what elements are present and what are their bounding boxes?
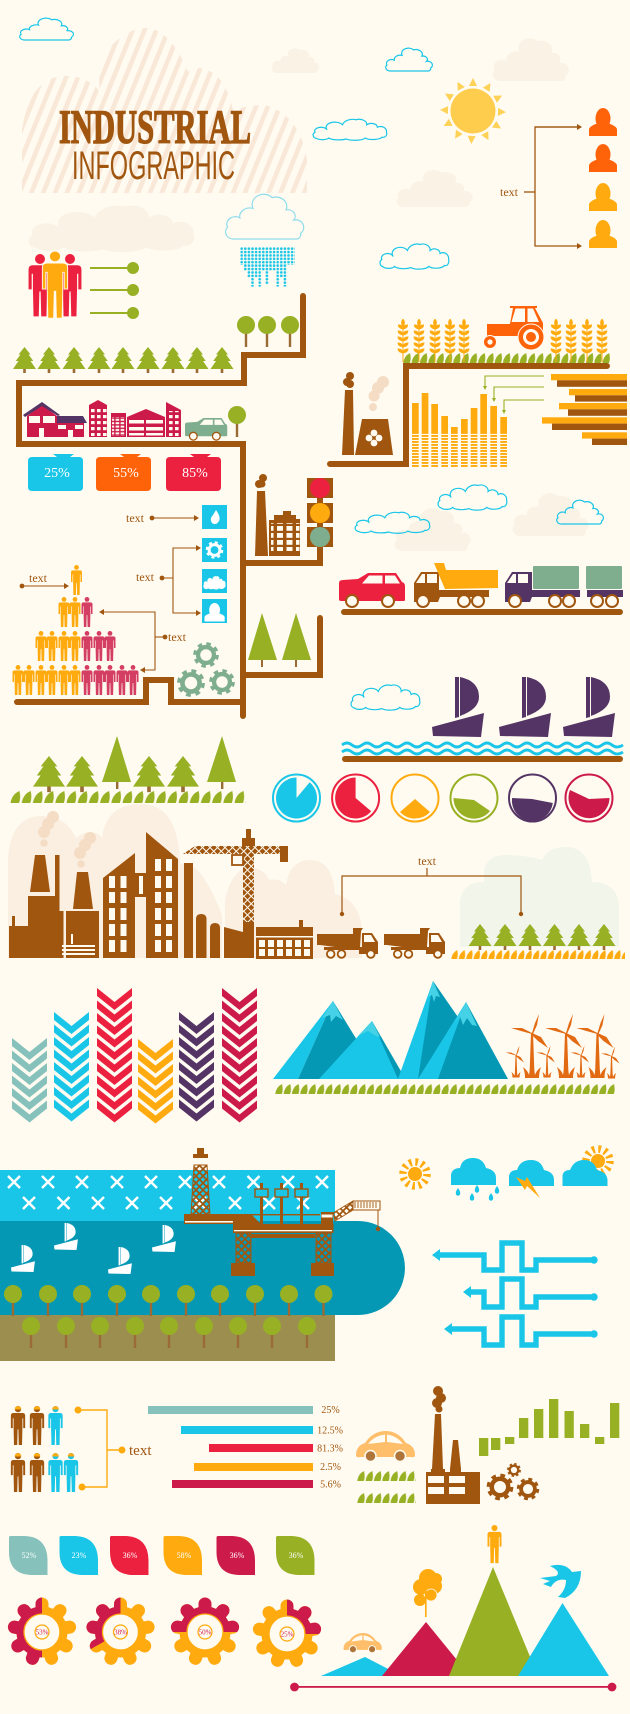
pipe, right: [330, 366, 607, 464]
percent leaves: 58%: [177, 1551, 192, 1560]
round trees: [237, 316, 299, 347]
callout labels: text: [168, 630, 187, 644]
factory, lower: [426, 1386, 480, 1504]
tractor: [484, 306, 544, 350]
shoreline: [345, 756, 620, 762]
percent tags: 25%: [44, 466, 70, 481]
pale background clouds, top: [29, 38, 569, 252]
chevron columns: [12, 988, 257, 1124]
horizontal bar chart: 81.3%: [317, 1444, 343, 1454]
callout labels: text: [136, 570, 155, 584]
swallow: [540, 1565, 581, 1598]
percent leaves: 23%: [72, 1551, 87, 1560]
flower gauge: 38%: 38%: [114, 1628, 127, 1636]
road: [344, 609, 620, 615]
amber tree: [413, 1569, 442, 1617]
percent leaves: [9, 1536, 314, 1575]
main pipe: [19, 296, 303, 716]
flower gauge: 25%: 25%: [281, 1630, 294, 1638]
label: text worker: text: [129, 1443, 152, 1459]
callout labels: text: [29, 571, 48, 585]
city silhouette: [9, 832, 313, 959]
green connector lines: [90, 263, 138, 318]
sky crosses: [8, 1176, 328, 1209]
timeline: [290, 1683, 616, 1691]
striped title cloud: [22, 28, 307, 193]
title: INDUSTRIAL: [59, 101, 251, 154]
avatars: [589, 108, 617, 248]
triangular trees: [248, 613, 311, 667]
rain dots: [240, 247, 295, 287]
red car: [339, 573, 405, 607]
peach car: [356, 1431, 415, 1462]
city backdrop: [8, 804, 362, 958]
traffic light: [307, 478, 333, 555]
forest backdrop: [460, 847, 619, 947]
title: [59, 101, 251, 188]
stacked bars, right: [542, 374, 627, 445]
oil rig: [184, 1148, 380, 1276]
people pyramid: [12, 565, 138, 695]
small car: [344, 1633, 382, 1653]
diverging green bars: [479, 1399, 619, 1456]
small grass strips: [357, 1471, 416, 1503]
clouds, middle right: [351, 485, 603, 710]
brown gears: [489, 1464, 537, 1498]
smoke plumes: [38, 811, 96, 868]
pines and amber field: [451, 924, 625, 959]
callout dots: [20, 516, 167, 639]
weather icons: [403, 1149, 610, 1201]
tree rows: [4, 1285, 332, 1348]
percent tags: 55%: [113, 466, 139, 481]
label: text over trucks: text: [418, 854, 437, 868]
horizontal bar chart: [148, 1405, 343, 1490]
callout labels: [29, 511, 187, 644]
factory with cooling tower: [342, 372, 393, 455]
blue outline clouds, top: [20, 18, 449, 269]
workers: [11, 1406, 78, 1492]
town: [23, 400, 246, 440]
tower crane: [183, 829, 288, 922]
pine row: [13, 347, 234, 373]
callout labels: text: [126, 511, 145, 525]
oil scene backdrop: [0, 1170, 405, 1361]
colored mountains: [321, 1567, 609, 1676]
percent tags: 85%: [182, 466, 208, 481]
green gears: [179, 644, 233, 695]
sailboats: [432, 677, 615, 737]
white sailboats: [11, 1223, 176, 1274]
percent leaves: 36%: [123, 1551, 138, 1560]
wind turbines: [506, 1014, 620, 1078]
summit person: [488, 1525, 501, 1563]
horizontal bar chart: 2.5%: [320, 1462, 341, 1473]
flower gauge: 53%: 53%: [36, 1628, 49, 1636]
bar chart, amber: [412, 393, 507, 467]
people group: [29, 251, 81, 318]
flower gauge: 50%: [177, 1604, 233, 1658]
pipe branches: [17, 550, 320, 702]
factory, left: [255, 474, 300, 556]
title: INFOGRAPHIC: [72, 144, 235, 188]
percent leaves: 36%: [230, 1551, 245, 1560]
grass strip: [275, 1084, 615, 1094]
percent leaves: 52%: [22, 1551, 37, 1560]
pipe arrows: [432, 1243, 598, 1345]
purple truck: [505, 566, 623, 607]
trucks, bottom city: [317, 928, 445, 958]
wheat field: [398, 319, 610, 363]
icon tiles: [202, 505, 227, 623]
green arrows: [485, 376, 544, 413]
percent tags: [28, 454, 221, 491]
horizontal bar chart: 5.6%: [320, 1480, 341, 1490]
worker bracket: [75, 1407, 125, 1490]
flower gauge: 25%: [259, 1606, 315, 1660]
dump truck: [414, 563, 498, 607]
horizontal bar chart: 12.5%: [317, 1426, 343, 1436]
bracket over trucks: [340, 868, 523, 916]
forest strip: [10, 736, 246, 803]
bracket to four avatars: [524, 127, 581, 246]
label: text: text: [500, 185, 519, 199]
waves: [342, 743, 623, 754]
callouts with arrows: [22, 518, 200, 670]
flower gauge: 38%: [93, 1604, 148, 1658]
flower gauge: 50%: 50%: [199, 1628, 212, 1636]
icon: sun: [440, 78, 506, 144]
mountains: [273, 981, 508, 1079]
percent leaves: 36%: [289, 1551, 304, 1560]
pie dials: [273, 774, 612, 822]
horizontal bar chart: 25%: [321, 1405, 340, 1416]
flower gauge: 53%: [14, 1604, 70, 1658]
